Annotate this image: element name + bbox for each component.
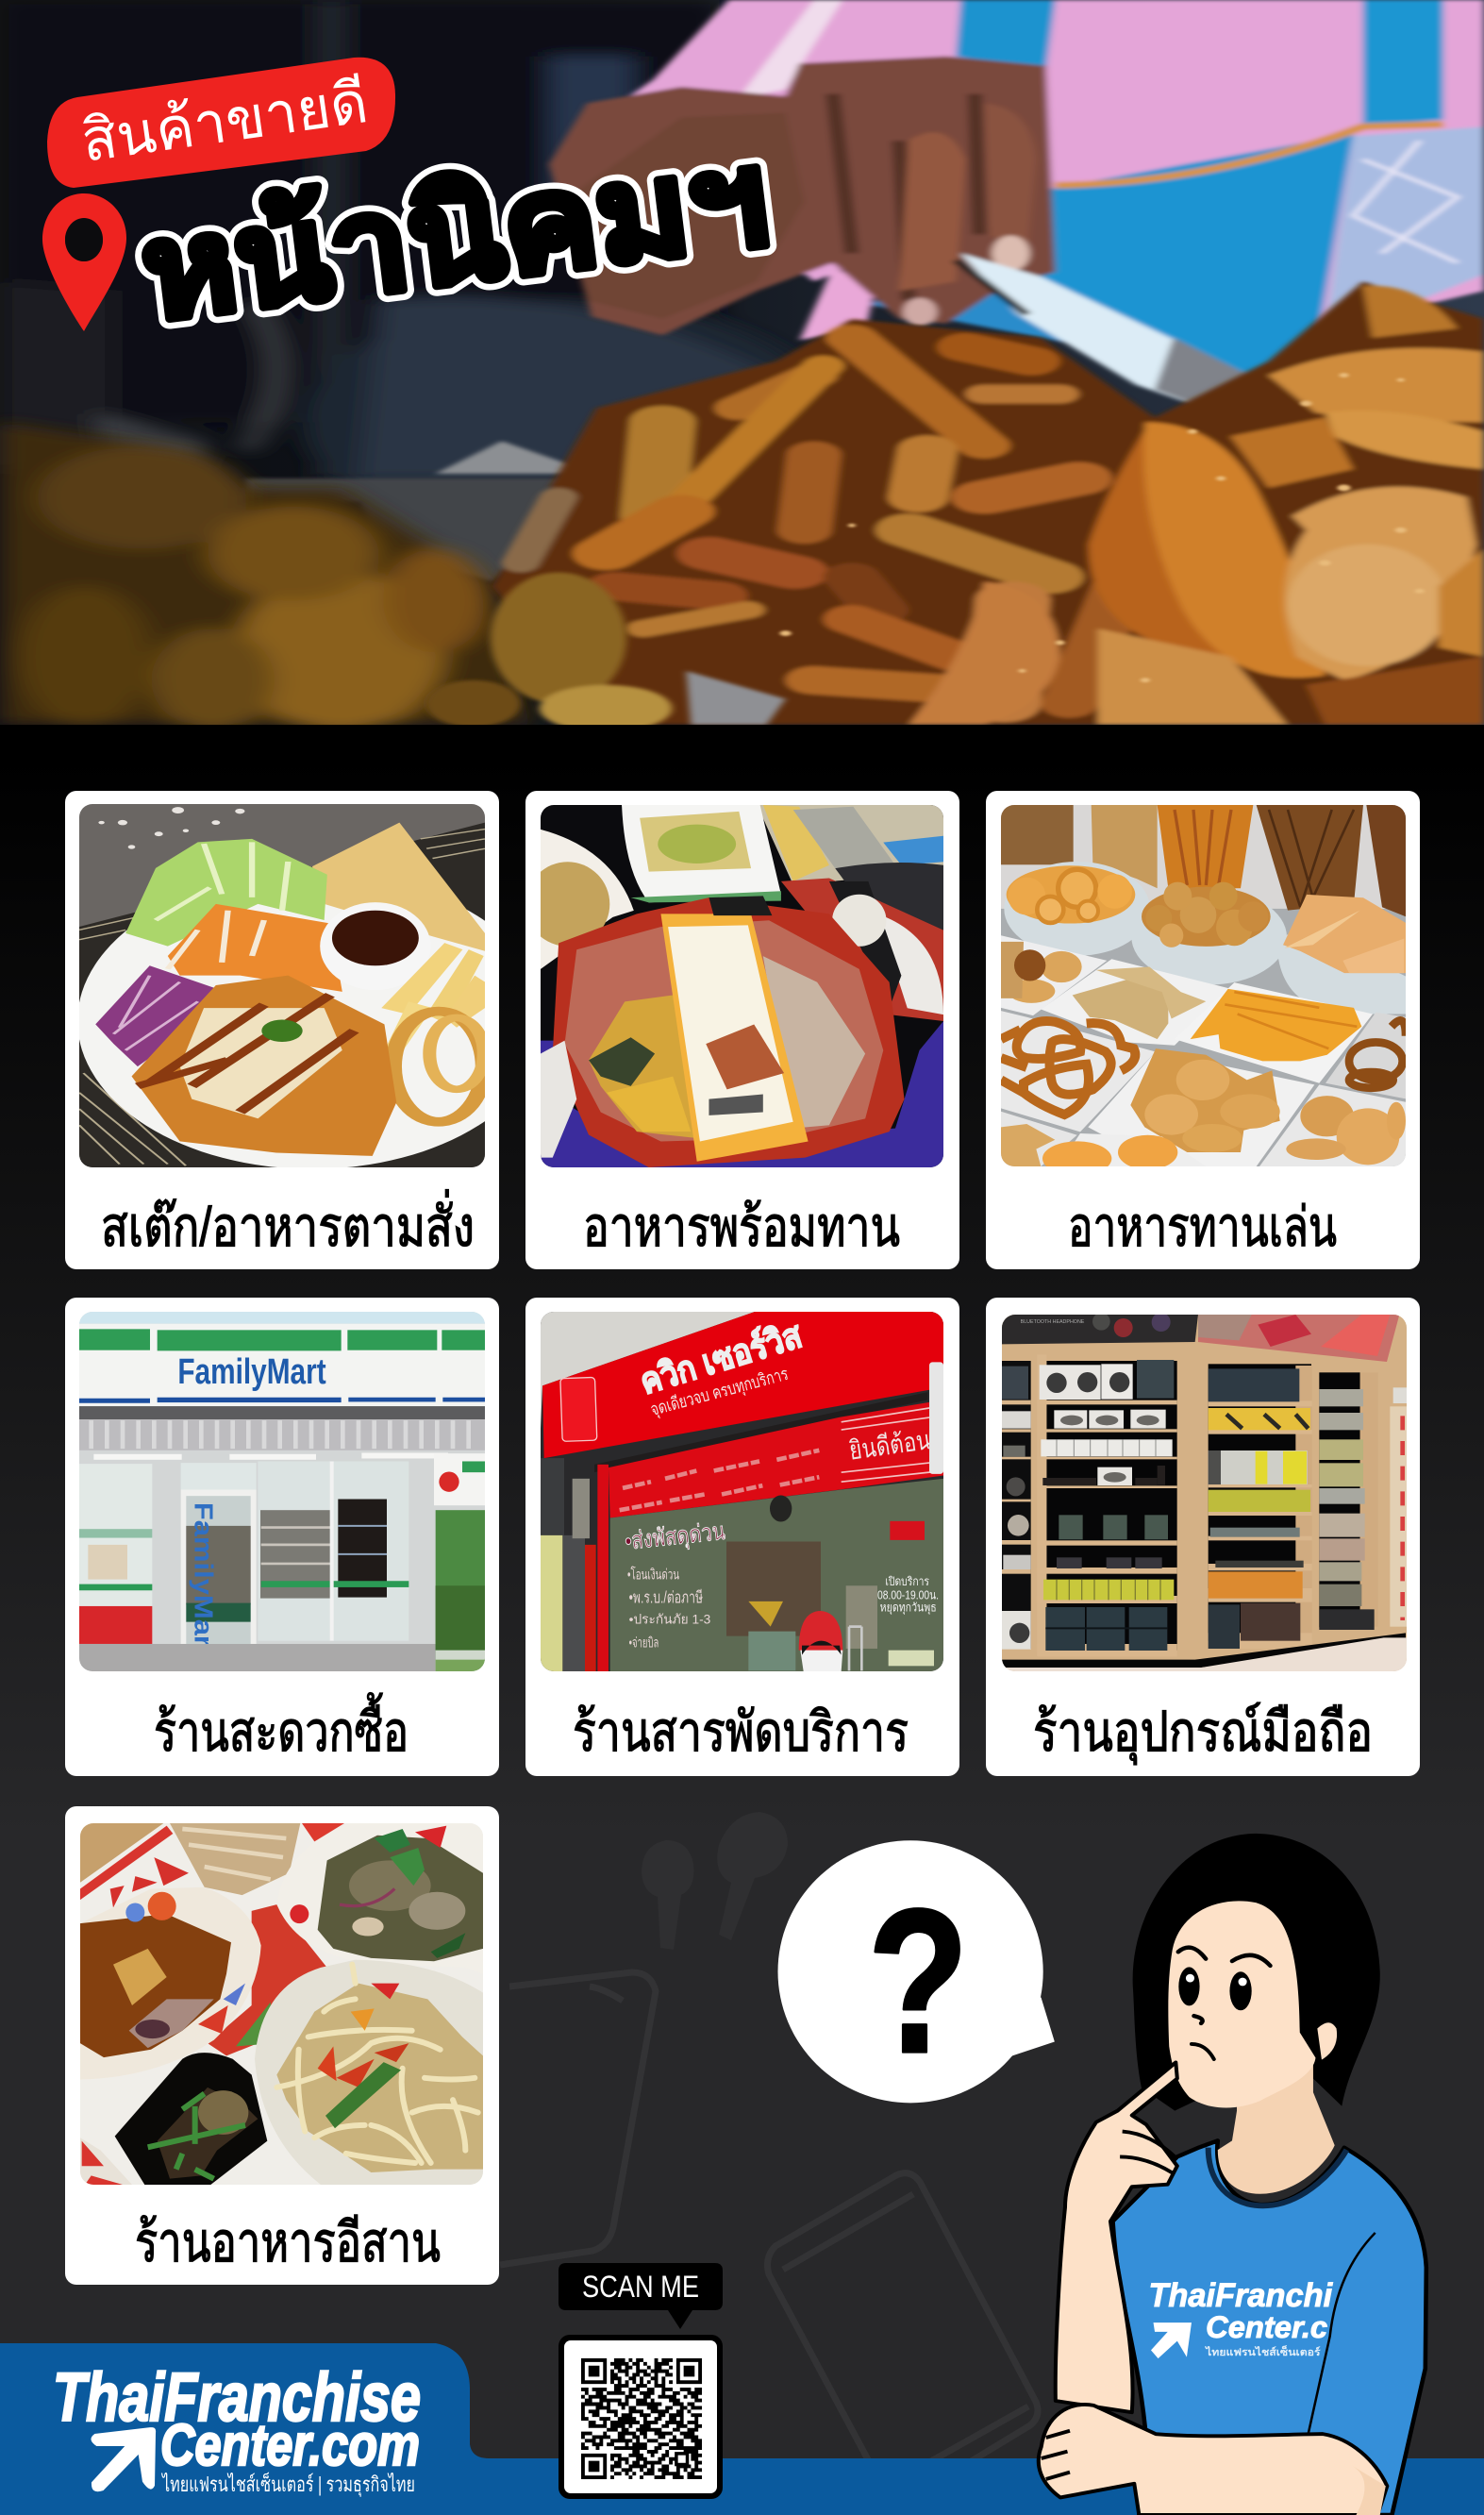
icon: location pin — [42, 193, 126, 331]
bowls — [1004, 862, 1150, 956]
footer: blue band and logo tab — [0, 2343, 1484, 2515]
red tray — [553, 897, 905, 1167]
photo: Quick Service storefront: •ส่งพัสดุด่วน — [624, 1518, 726, 1556]
shirt logo arrow — [1151, 2322, 1192, 2358]
photo: ready meal trays — [541, 805, 943, 1167]
panel: steak and a la carte — [65, 791, 499, 1269]
plate — [77, 873, 547, 1169]
product label — [660, 914, 809, 1162]
photo: steak plate — [79, 804, 485, 1167]
larb plate — [276, 1823, 483, 1974]
photo: accessory shelves — [1002, 1315, 1407, 1671]
callout: scan me — [559, 2263, 723, 2329]
plates — [1001, 935, 1107, 1015]
QR code — [559, 2335, 723, 2499]
callout: scan me: SCAN ME — [582, 2270, 699, 2304]
shirt logo: ThaiFranchi — [1148, 2277, 1333, 2314]
big fried pieces — [1089, 422, 1240, 671]
photo: Quick Service storefront: •ประกันภัย 1-3 — [629, 1611, 711, 1626]
tongs — [960, 253, 1249, 417]
photo: Quick Service storefront: จุดเดียวจบ ครบทุกบริการ — [648, 1364, 791, 1421]
shirt logo: Center.c — [1206, 2310, 1327, 2344]
shirt — [1113, 2140, 1426, 2515]
somtam plate — [255, 1960, 483, 2185]
tag: best seller red pill — [47, 57, 396, 188]
panel: ready meals — [525, 791, 959, 1269]
photo: FamilyMart storefront: FamilyMart — [190, 1502, 219, 1656]
panel: mobile accessory shop — [986, 1298, 1420, 1776]
photo: Quick Service storefront — [541, 1312, 943, 1671]
tag: best seller red pill: สินค้าขายดี — [77, 70, 372, 175]
potato ball foreground — [425, 572, 786, 731]
photo: FamilyMart storefront: FamilyMart — [177, 1352, 326, 1392]
ear — [1315, 2021, 1339, 2062]
photo: snack bowls and plates — [1001, 805, 1406, 1166]
photo: Quick Service storefront: •โอนเงินด่วน — [627, 1567, 679, 1584]
black sauce dish — [115, 2053, 267, 2185]
speech bubble with question mark: ? — [868, 1866, 969, 2095]
faded background icons: airpods and phones — [500, 1813, 1042, 2458]
shirt logo — [1148, 2277, 1333, 2358]
panel: Isan restaurant — [65, 1806, 499, 2285]
label: ร้านสะดวกซื้อ — [154, 1693, 409, 1763]
hero photo: vendor tongs and fried snacks — [0, 0, 1484, 725]
shirt — [606, 0, 1484, 328]
panel: parcel service shop — [525, 1298, 959, 1776]
folded forearm and fist — [1039, 2405, 1387, 2515]
mascot: thinking person — [1039, 1834, 1426, 2515]
arm and hand — [549, 57, 1056, 335]
neck — [1218, 2055, 1335, 2194]
hair — [1133, 1834, 1380, 2111]
photo: Quick Service storefront: •พ.ร.บ./ต่อภาษี — [629, 1588, 703, 1607]
face — [1168, 1901, 1315, 2108]
logo: ThaiFranchiseCenter.com — [53, 2364, 421, 2497]
speech bubble with question mark — [777, 1833, 1428, 2515]
panel: snacks — [986, 791, 1420, 1269]
photo: Quick Service storefront: เปิดบริการ — [885, 1575, 929, 1588]
photo: accessory shelves: BLUETOOTH HEADPHONE — [1021, 1319, 1085, 1325]
metal tray — [246, 478, 615, 581]
label: อาหารทานเล่น — [1068, 1197, 1337, 1258]
panel: convenience store — [65, 1298, 499, 1776]
photo: Quick Service storefront: •จ่ายบิล — [629, 1635, 659, 1651]
raised arm and hand — [1056, 2062, 1177, 2412]
icon: logo arrow — [90, 2426, 157, 2492]
fried banana and taro pile — [492, 281, 1484, 725]
left potato balls — [0, 422, 530, 731]
chicken plate — [80, 1887, 261, 2079]
dark alcoves — [1002, 1361, 1031, 1649]
photo: FamilyMart storefront — [79, 1312, 485, 1671]
photo: Isan dishes — [80, 1823, 483, 2185]
shirt logo: ไทยแฟรนไชส์เซ็นเตอร์ — [1204, 2345, 1321, 2358]
